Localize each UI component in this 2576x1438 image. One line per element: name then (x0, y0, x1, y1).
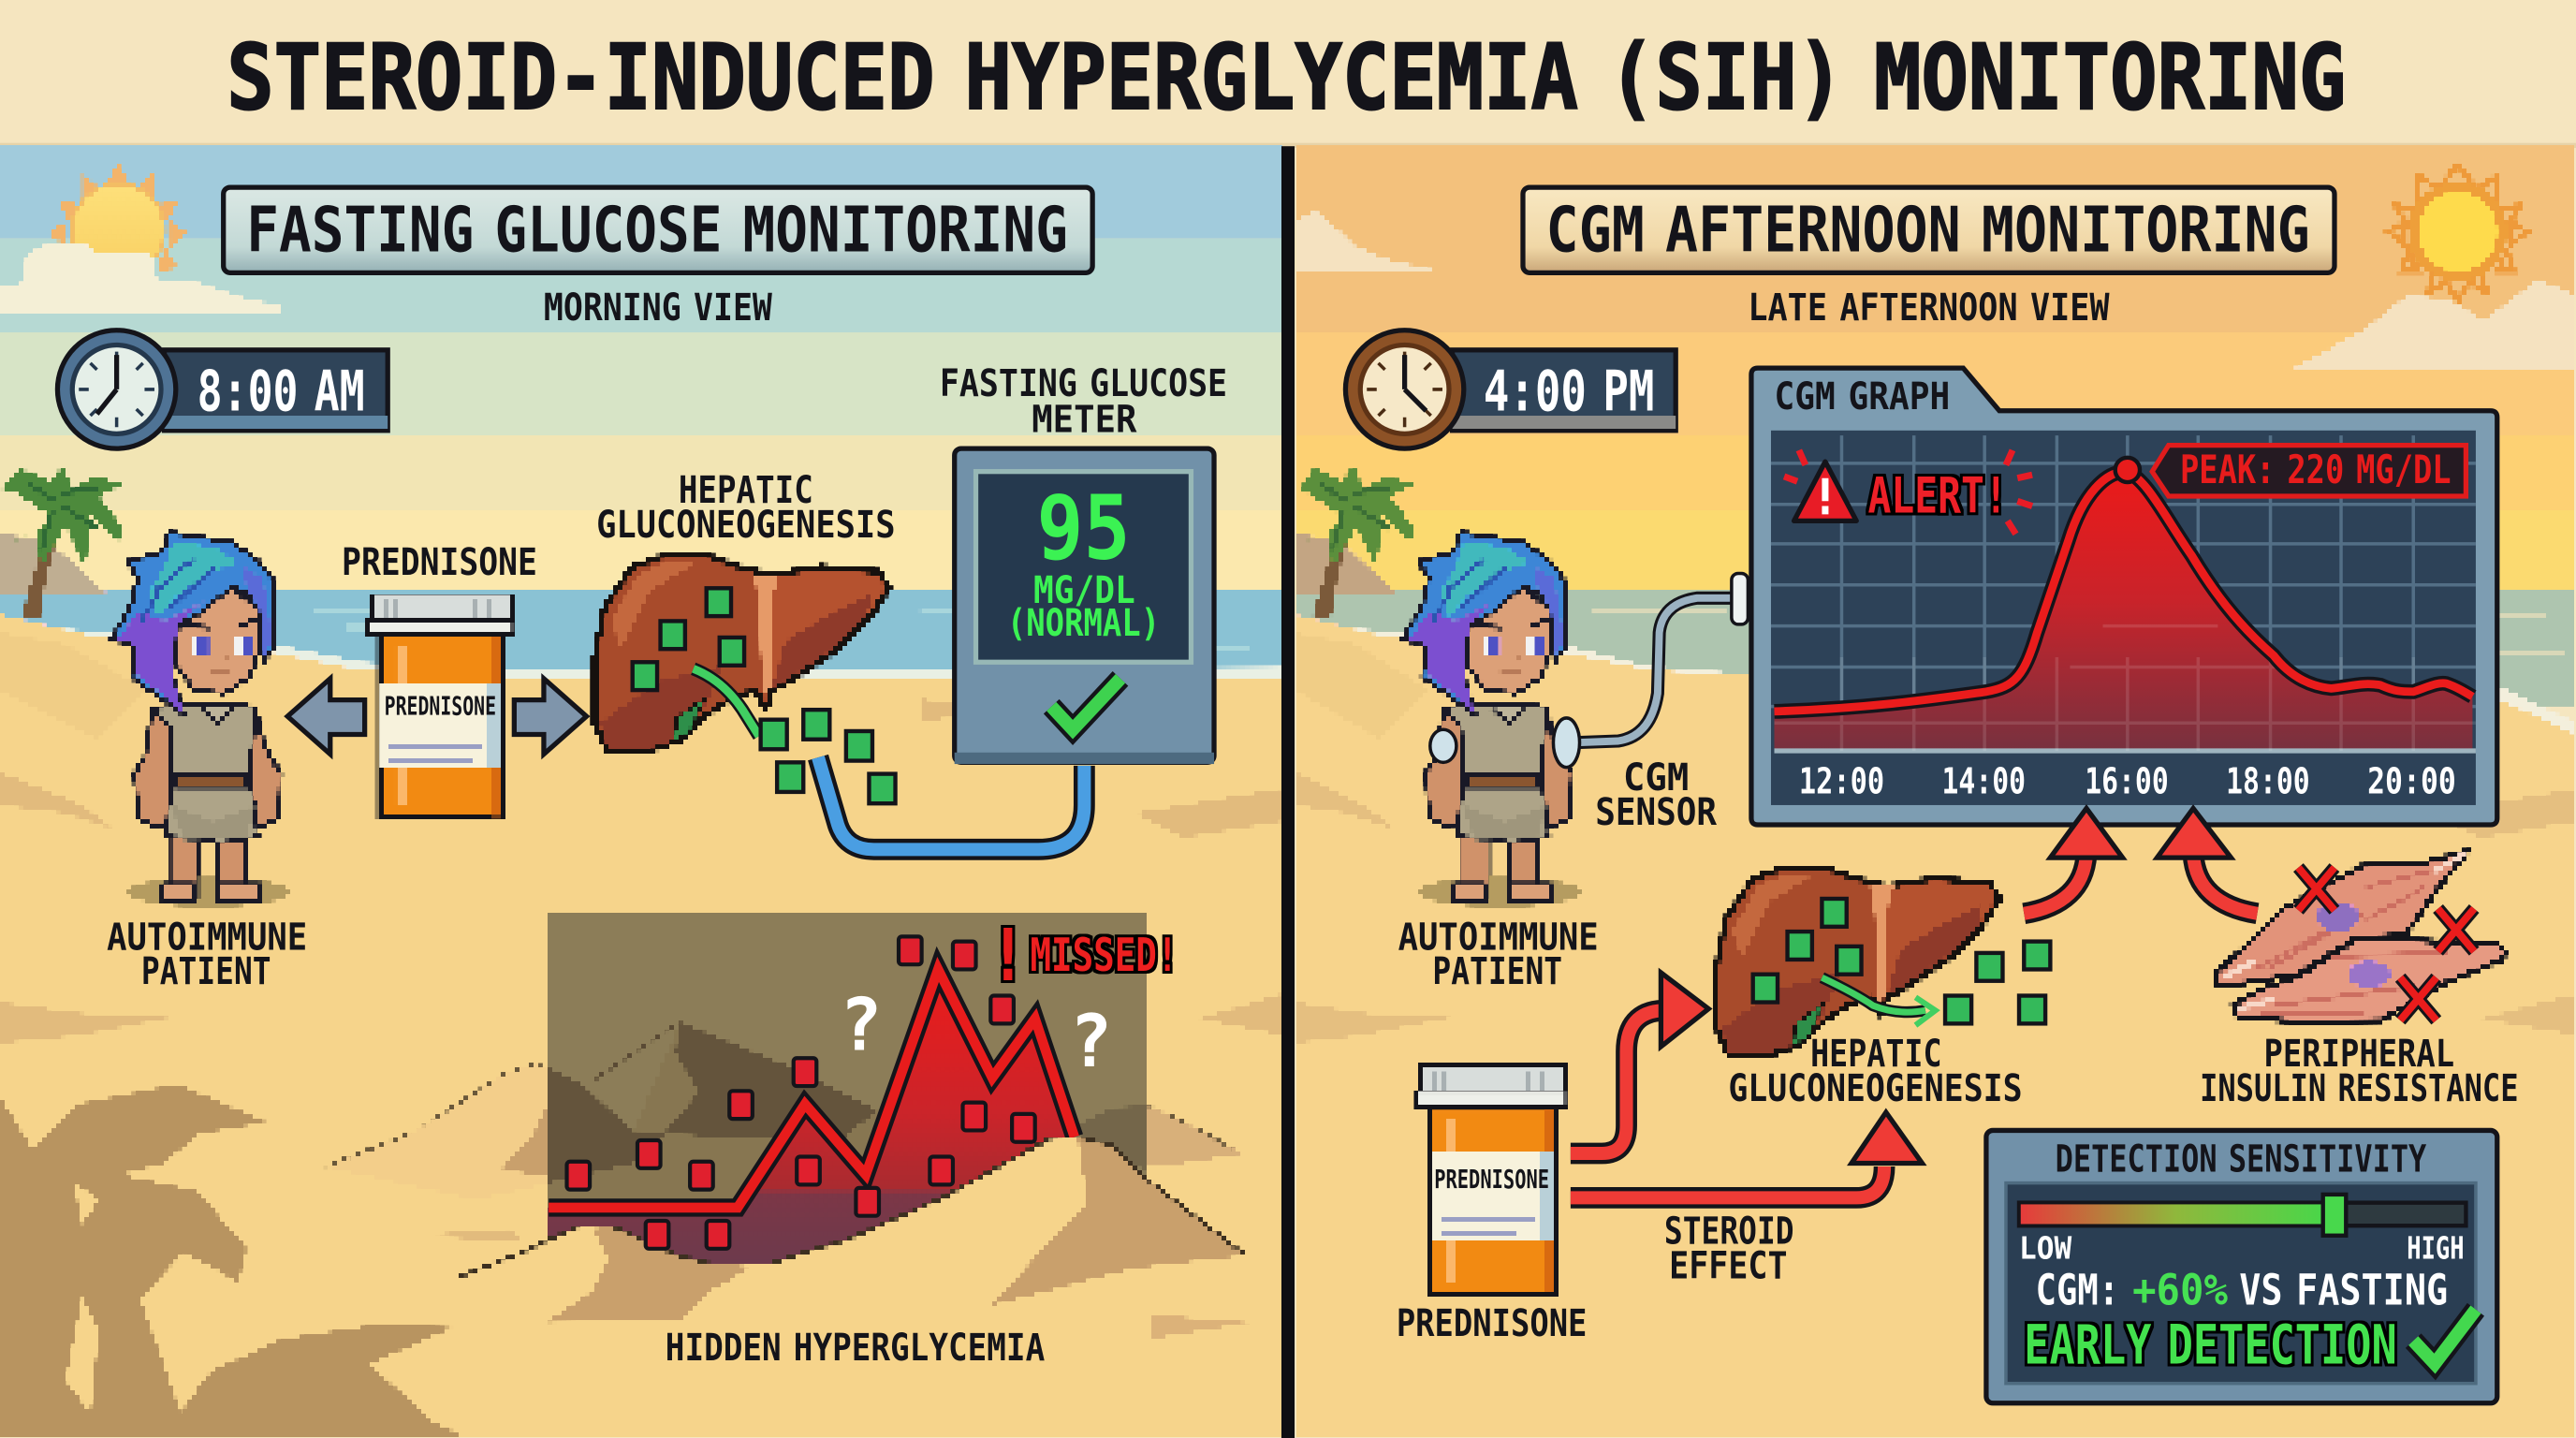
meter label: FASTING GLUCOSE (940, 361, 1227, 405)
steroid effect label (1664, 1210, 1794, 1287)
grid (1771, 435, 2476, 751)
time axis labels: 12:00 (1799, 761, 1884, 803)
tab label: CGM GRAPH (1775, 374, 1950, 418)
header banner (0, 0, 2576, 148)
slider ends (2019, 1229, 2465, 1266)
liver: hepatic gluconeogenesis: HEPATIC (679, 468, 813, 512)
prednisone bottle: PREDNISONE (342, 540, 537, 584)
steroid effect label: STEROID (1664, 1210, 1794, 1254)
slider ends: HIGH (2407, 1229, 2465, 1266)
meter tube (818, 757, 1084, 849)
missed callout: ! (992, 917, 1023, 996)
time label: 4:00 PM (1484, 360, 1654, 425)
liver: hepatic gluconeogenesis (1717, 868, 2050, 1110)
patient label: PATIENT (141, 949, 271, 993)
glucose area (1775, 472, 2472, 751)
cgm comparison (2036, 1265, 2448, 1314)
cgm comparison: CGM: (2036, 1265, 2119, 1314)
subheading: morning view: MORNING VIEW (544, 286, 772, 330)
time axis labels: 20:00 (2367, 761, 2456, 803)
patient label: PATIENT (1432, 949, 1562, 993)
meter label (940, 361, 1227, 442)
sensor label: CGM (1623, 756, 1689, 800)
early detection: EARLY DETECTION (2024, 1313, 2397, 1377)
liver label: GLUCONEOGENESIS (1728, 1066, 2023, 1110)
patient with sensor (1398, 533, 1748, 993)
prednisone bottle: PREDNISONE (1434, 1166, 1549, 1195)
alert icon: ALERT! (1868, 468, 2008, 525)
sun (2389, 165, 2526, 301)
palm shadows (0, 1084, 468, 1438)
resistance label: PERIPHERAL (2264, 1032, 2454, 1076)
prednisone bottle: PREDNISONE (385, 692, 496, 721)
alert icon (1784, 450, 2032, 534)
question marks: ? (840, 983, 882, 1067)
glucose readings (567, 936, 1035, 1249)
slider ends: LOW (2019, 1229, 2072, 1266)
meter reading (1007, 477, 1160, 645)
arrow: prednisone to liver (514, 679, 587, 755)
time axis labels (1799, 761, 2456, 803)
time label: 8:00 AM (198, 360, 365, 425)
patient label (107, 915, 307, 993)
chart: hidden hyperglycemia (326, 912, 1281, 1438)
glucose line (549, 969, 1075, 1208)
meter reading: MG/DL (1033, 568, 1135, 612)
foreground dune (460, 1137, 1281, 1438)
arrow: prednisone to patient (287, 679, 365, 755)
question marks (840, 983, 1112, 1084)
resistance x marks (2298, 868, 2474, 1020)
liver label (1728, 1032, 2023, 1110)
cgm graph window (1751, 368, 2497, 825)
sensor label (1595, 756, 1718, 834)
sun and cloud (0, 165, 283, 315)
panel divider (1281, 146, 1295, 1438)
sensor label: SENSOR (1595, 790, 1718, 834)
panel: cgm afternoon monitoring (1295, 146, 2576, 1438)
section heading: FASTING GLUCOSE MONITORING (246, 194, 1068, 267)
resistance label (2200, 1032, 2519, 1110)
arrow: resistance to graph (2157, 808, 2258, 914)
time axis labels: 16:00 (2085, 761, 2169, 803)
missed callout: MISSED! (1030, 928, 1178, 982)
liver label: HEPATIC (1810, 1032, 1942, 1076)
subheading: late afternoon view: LATE AFTERNOON VIEW (1748, 286, 2110, 330)
arrow: liver to graph (2024, 808, 2123, 914)
patient label: AUTOIMMUNE (107, 915, 307, 959)
clock 4:00 pm (1345, 330, 1676, 448)
palm tree (0, 466, 124, 618)
morning beach background (0, 146, 1281, 1438)
arrow: steroid effect (1571, 1112, 1922, 1197)
peak callout: PEAK: 220 MG/DL (2180, 447, 2452, 492)
cgm comparison: +60% (2132, 1265, 2228, 1314)
chart label: HIDDEN HYPERGLYCEMIA (666, 1326, 1045, 1370)
prednisone bottle (1397, 1066, 1587, 1345)
glucose curve (1775, 472, 2472, 712)
question marks: ? (1070, 1000, 1112, 1084)
fasting glucose meter (940, 361, 1227, 764)
palm tree (1298, 466, 1414, 618)
arrow: prednisone to liver (1571, 973, 1708, 1153)
time axis labels: 14:00 (1942, 761, 2026, 803)
panel title: DETECTION SENSITIVITY (2056, 1137, 2427, 1181)
steroid effect label: EFFECT (1669, 1243, 1788, 1287)
afternoon beach background (1295, 146, 2576, 1438)
missed callout (992, 917, 1178, 996)
dunes behind chart (326, 912, 1242, 1298)
detection sensitivity panel (1986, 1130, 2497, 1403)
peripheral insulin resistance (2200, 851, 2519, 1110)
time axis labels: 18:00 (2226, 761, 2310, 803)
patient (107, 533, 307, 993)
patient label: AUTOIMMUNE (1398, 915, 1599, 959)
section heading: CGM AFTERNOON MONITORING (1546, 194, 2310, 267)
panel: fasting glucose monitoring (morning) (0, 146, 1281, 1438)
cgm comparison: VS FASTING (2239, 1265, 2448, 1314)
sensor cable (1430, 573, 1748, 768)
meter reading: 95 (1036, 477, 1131, 580)
liver: hepatic gluconeogenesis: GLUCONEOGENESIS (596, 503, 896, 547)
clock 8:00 am (57, 330, 388, 448)
meter reading: (NORMAL) (1007, 601, 1160, 645)
meter label: METER (1032, 398, 1137, 442)
patient label (1398, 915, 1599, 993)
liver: hepatic gluconeogenesis (594, 468, 896, 803)
icon: check mark (1051, 679, 1120, 729)
sensitivity slider (2019, 1195, 2466, 1236)
bottle label: PREDNISONE (1397, 1301, 1587, 1345)
prednisone bottle (342, 540, 537, 816)
